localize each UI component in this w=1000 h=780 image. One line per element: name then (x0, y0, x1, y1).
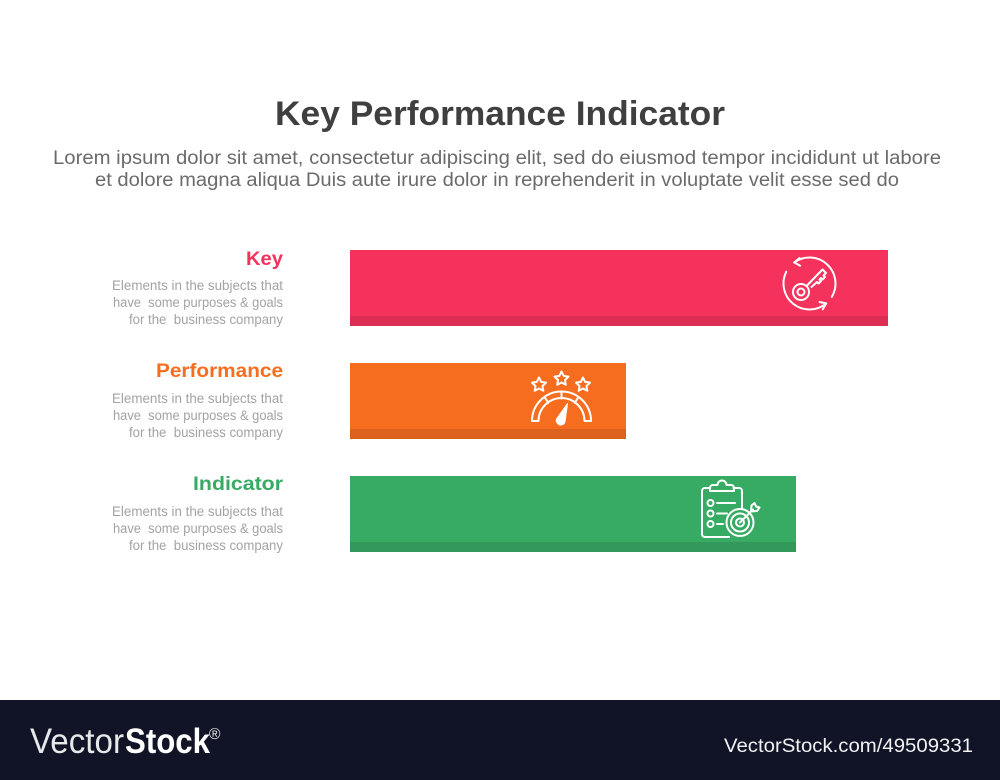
heading: Key: Key (246, 248, 283, 270)
description: Indicator (112, 504, 283, 553)
description: Key: have some purposes & goals (113, 295, 283, 310)
description: Performance: for the business company (129, 425, 283, 440)
bar: Indicator (350, 476, 796, 552)
description: Key: Elements in the subjects that (112, 278, 283, 293)
watermark logo: Stock (125, 722, 210, 761)
heading: Indicator: Indicator (193, 473, 283, 495)
subtitle text: Lorem ipsum dolor sit amet, consectetur adipiscing elit, sed do eiusmod tempor incididunt ut labore (53, 148, 941, 169)
heading: Performance: Performance (156, 360, 283, 382)
watermark logo: Vector (30, 722, 124, 761)
bar: Performance (350, 363, 626, 439)
watermark logo: ® (209, 726, 221, 743)
icon: gauge with stars (532, 372, 591, 425)
title: Key Performance Indicator (275, 95, 725, 133)
subtitle text (53, 148, 941, 191)
icon: key with circular arrows (783, 258, 836, 309)
description: Indicator: for the business company (129, 538, 283, 553)
watermark id: VectorStock.com/49509331 (724, 736, 973, 757)
watermark logo (30, 722, 221, 761)
description: Indicator: have some purposes & goals (113, 521, 283, 536)
description: Key (112, 278, 283, 327)
description: Performance (112, 391, 283, 440)
row label: Performance (112, 360, 283, 440)
row label: Indicator (112, 473, 283, 553)
subtitle text: et dolore magna aliqua Duis aute irure dolor in reprehenderit in voluptate velit esse sed do (95, 170, 899, 191)
description: Key: for the business company (129, 312, 283, 327)
row label: Key (112, 248, 283, 327)
icon: clipboard with target (702, 480, 760, 537)
description: Performance: Elements in the subjects that (112, 391, 283, 406)
description: Indicator: Elements in the subjects that (112, 504, 283, 519)
bar: Key (350, 250, 888, 326)
footer band (0, 700, 1000, 780)
description: Performance: have some purposes & goals (113, 408, 283, 423)
